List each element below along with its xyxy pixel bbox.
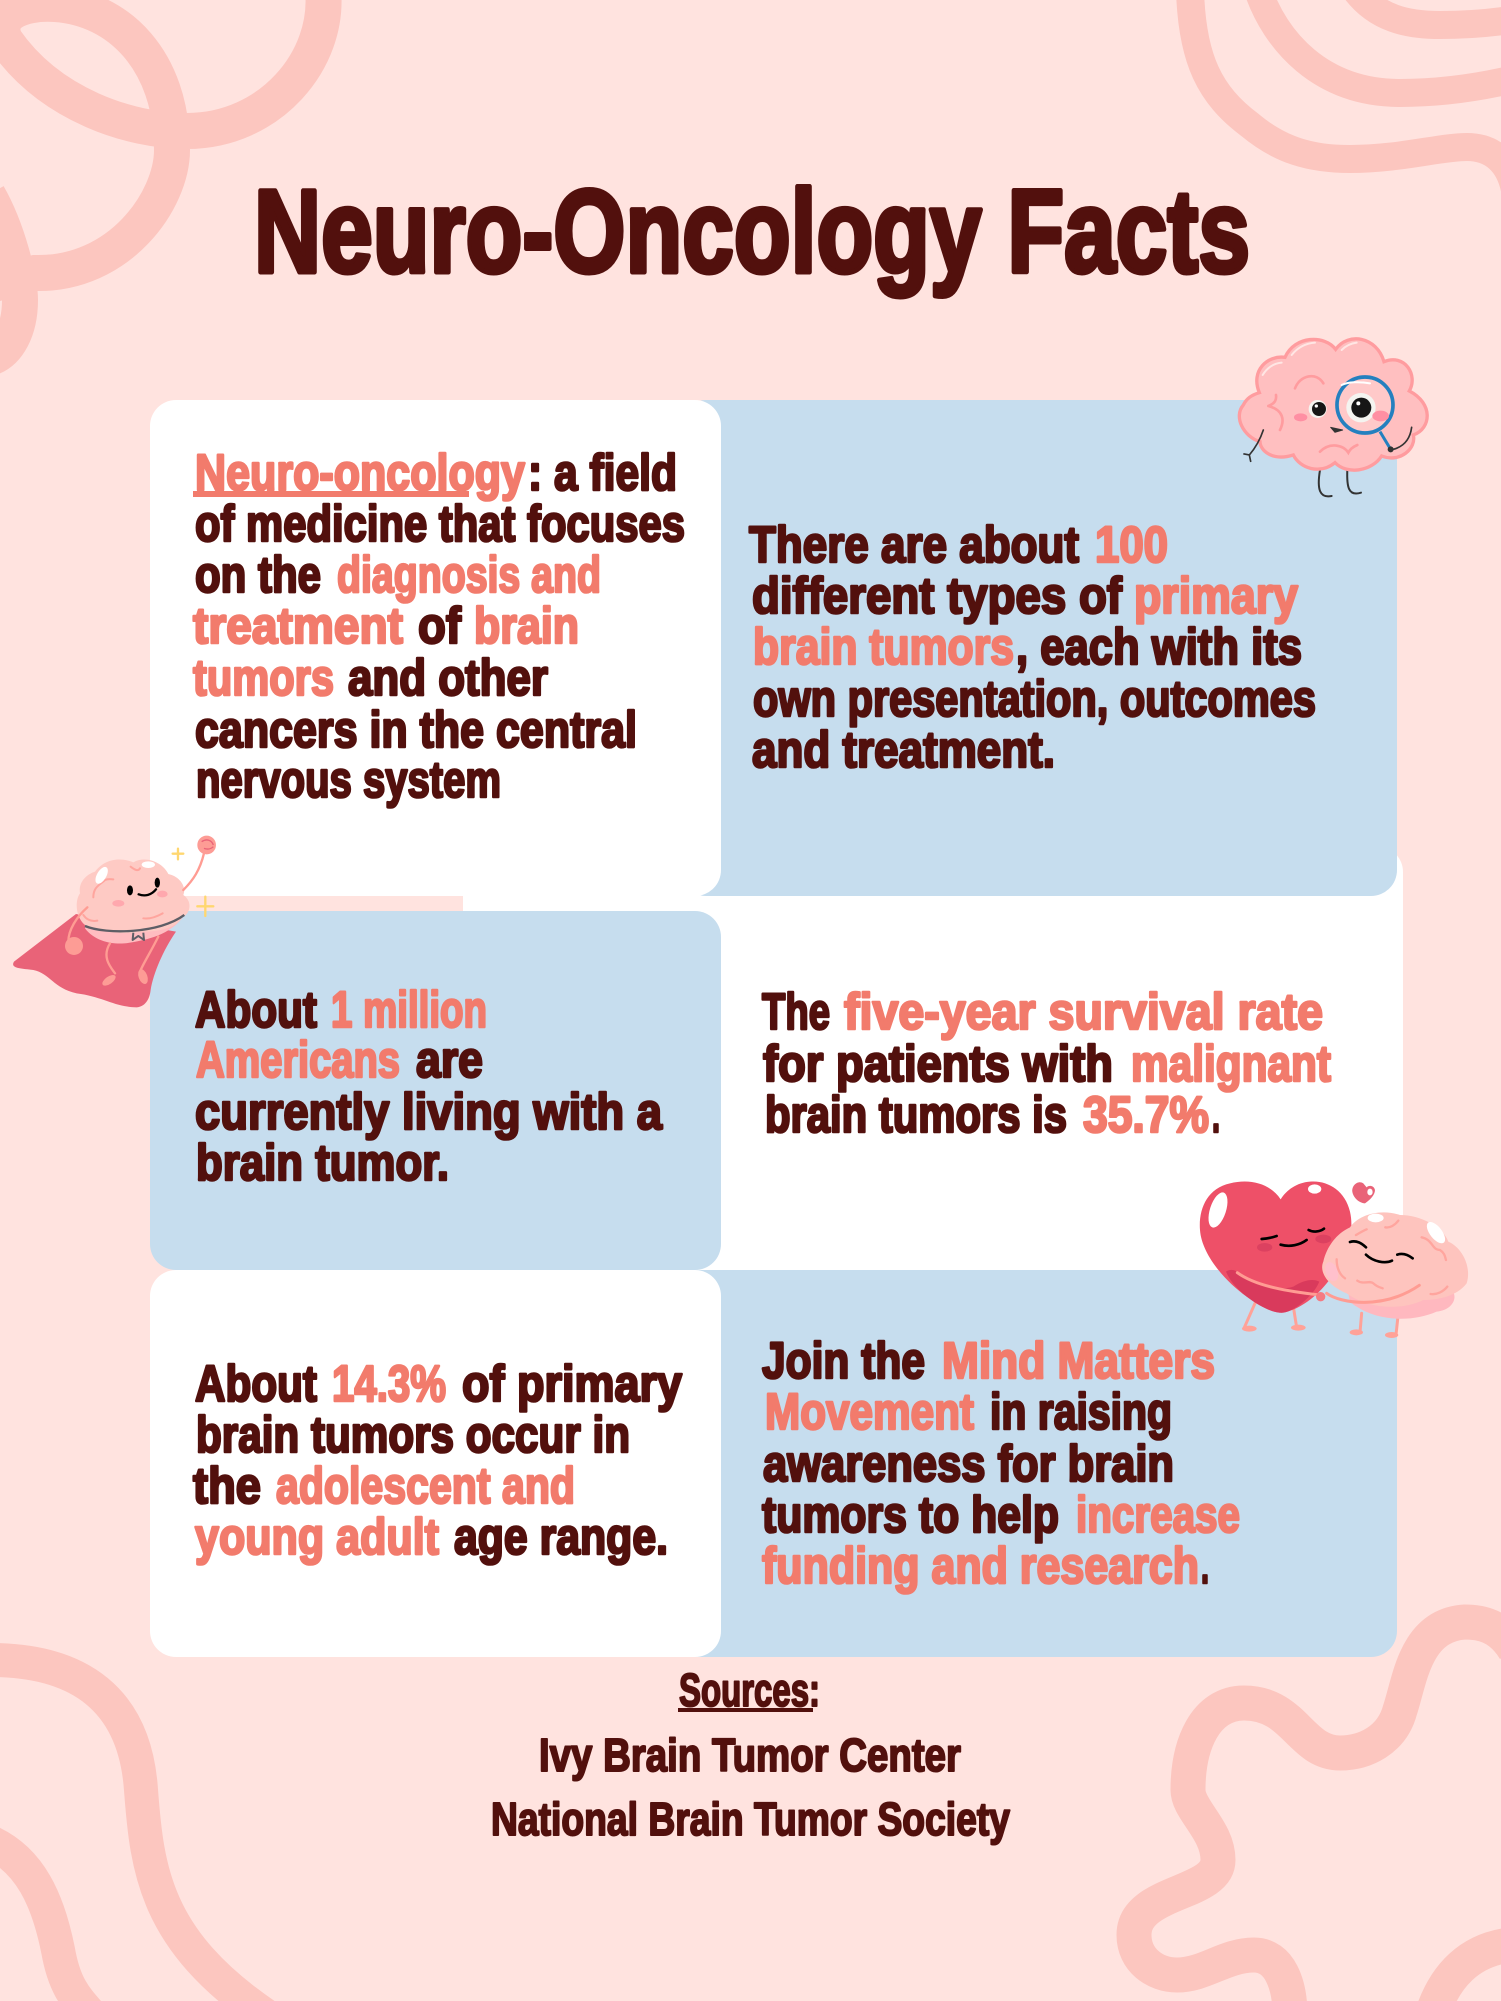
text: neuro-oncology definition: on the — [195, 546, 321, 603]
text: prevalence fact: About — [195, 981, 317, 1038]
text: prevalence fact: 1 million — [331, 981, 487, 1038]
sources — [491, 1664, 1010, 1845]
text: age range fact: the — [193, 1457, 261, 1514]
background swirl: bottom left — [0, 1660, 265, 2001]
sources: Ivy Brain Tumor Center — [539, 1729, 961, 1781]
text: tumor types fact — [749, 516, 1316, 778]
text: tumor types fact: and treatment. — [752, 721, 1055, 778]
panel: adolescent and young adult — [150, 1270, 721, 1657]
text: age range fact: brain tumors occur in — [196, 1406, 630, 1463]
text: age range fact: 14.3% — [332, 1355, 446, 1412]
text: age range fact: young adult — [195, 1508, 439, 1565]
text: tumor types fact: 100 — [1095, 516, 1168, 573]
text: prevalence fact: currently living with a — [195, 1083, 663, 1140]
text: neuro-oncology definition: : a field — [528, 444, 677, 501]
text: survival rate fact: five-year survival rate — [844, 983, 1323, 1040]
text: tumor types fact: different types of — [752, 567, 1123, 624]
text: call to action: awareness for brain — [763, 1435, 1174, 1492]
text: prevalence fact: brain tumor. — [196, 1134, 449, 1191]
sources: National Brain Tumor Society — [491, 1793, 1010, 1845]
text: survival rate fact — [762, 983, 1331, 1143]
text: tumor types fact: brain tumors — [753, 618, 1014, 675]
text: age range fact: adolescent and — [276, 1457, 575, 1514]
text: neuro-oncology definition: Neuro-oncology — [195, 444, 526, 501]
sources: Sources: — [679, 1664, 820, 1716]
text: neuro-oncology definition: of — [418, 597, 462, 654]
text: tumor types fact: There are about — [749, 516, 1079, 573]
background swirl: top left — [0, 0, 324, 358]
icon: superhero brain with cape — [13, 836, 216, 1007]
text: neuro-oncology definition: brain — [474, 597, 579, 654]
text: neuro-oncology definition: treatment — [193, 597, 403, 654]
background swirl: bottom right — [1134, 1622, 1501, 2001]
text: prevalence fact: Americans — [196, 1031, 400, 1088]
text: survival rate fact: The — [762, 983, 830, 1040]
text: neuro-oncology definition: of medicine that focuses — [195, 495, 685, 552]
text: neuro-oncology definition: cancers in the central — [195, 701, 637, 758]
text: call to action: in raising — [990, 1383, 1172, 1440]
text: call to action: funding and research — [762, 1537, 1199, 1594]
text: age range fact: of primary — [462, 1355, 683, 1412]
text: prevalence fact: are — [416, 1031, 483, 1088]
text: call to action: . — [1201, 1537, 1209, 1594]
background swirl: top right — [1190, 0, 1501, 190]
text: age range fact: About — [195, 1355, 317, 1412]
text: survival rate fact: 35.7% — [1083, 1086, 1209, 1143]
panel: definition of neuro-oncology — [150, 400, 721, 896]
text: neuro-oncology definition — [193, 444, 685, 808]
panel: five-year survival rate — [463, 846, 1403, 1270]
text: neuro-oncology definition: nervous system — [196, 751, 501, 808]
text: survival rate fact: . — [1212, 1086, 1220, 1143]
icon: heart hugging brain — [1200, 1181, 1468, 1338]
text: tumor types fact: own presentation, outcomes — [753, 670, 1316, 727]
panel: 100 types of brain tumors — [680, 400, 1397, 896]
text: call to action: increase — [1076, 1486, 1240, 1543]
text: call to action: Join the — [762, 1332, 925, 1389]
text: call to action: Mind Matters — [942, 1332, 1215, 1389]
text: age range fact: age range. — [454, 1508, 668, 1565]
text: tumor types fact: , each with its — [1016, 618, 1302, 675]
text: survival rate fact: for patients with — [763, 1035, 1113, 1092]
text: neuro-oncology definition: diagnosis and — [337, 546, 601, 603]
text: survival rate fact: brain tumors is — [765, 1086, 1067, 1143]
icon: brain with magnifying glass — [1239, 339, 1427, 496]
text: neuro-oncology definition: and other — [348, 649, 548, 706]
text: tumor types fact: primary — [1134, 567, 1299, 624]
text: survival rate fact: malignant — [1131, 1035, 1331, 1092]
panel: 1 million Americans — [150, 911, 721, 1270]
text: neuro-oncology definition: tumors — [193, 649, 334, 706]
panel: Mind Matters Movement — [680, 1270, 1397, 1657]
text: call to action: tumors to help — [762, 1486, 1059, 1543]
text: call to action: Movement — [765, 1383, 974, 1440]
title: Neuro-Oncology Facts — [254, 166, 1250, 298]
text: call to action — [762, 1332, 1240, 1594]
text: prevalence fact — [195, 981, 663, 1191]
text: age range fact — [193, 1355, 683, 1565]
